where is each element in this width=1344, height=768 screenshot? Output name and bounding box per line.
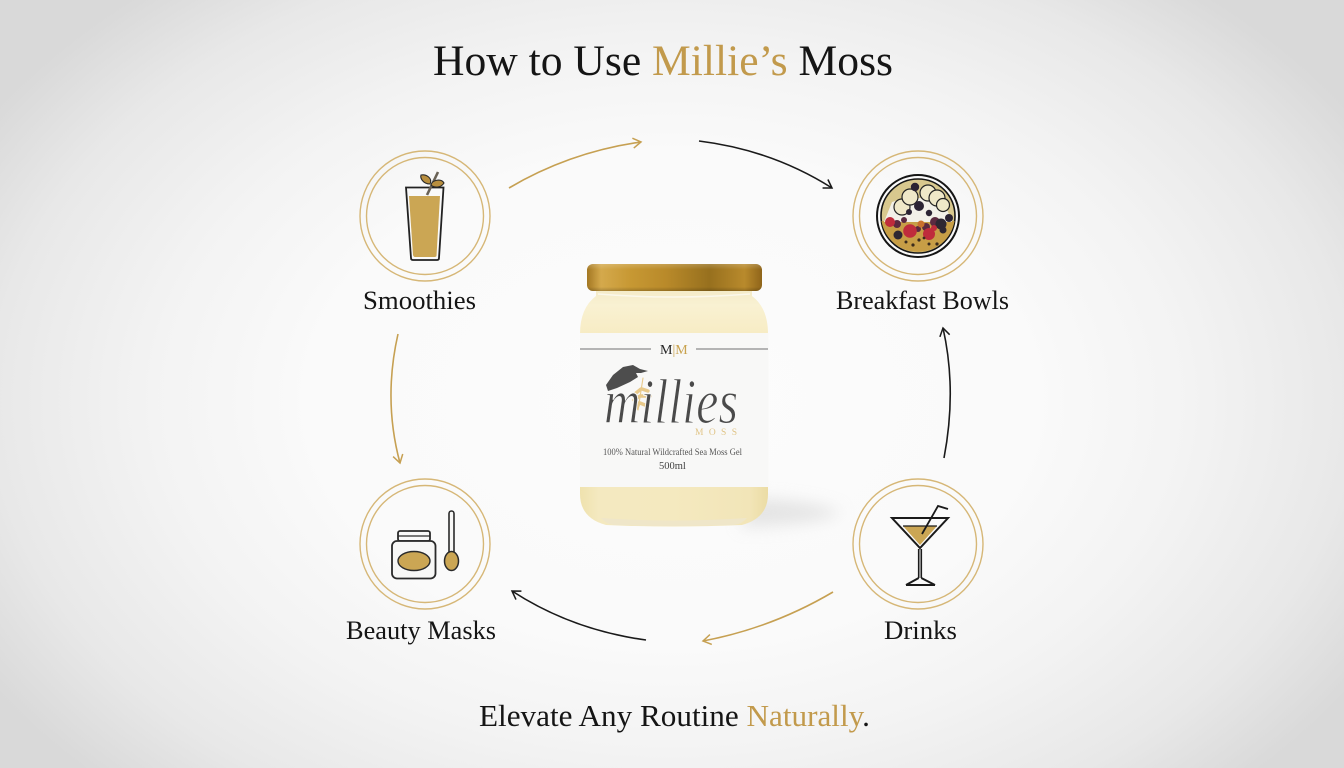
arrow: bottom to beauty masks — [512, 591, 646, 640]
label logo: sprig — [634, 378, 650, 410]
icon ring: breakfast bowls — [853, 151, 983, 281]
jar shadow — [740, 499, 842, 527]
label description: 100% Natural Wildcrafted Sea Moss Gel — [603, 447, 742, 458]
icon ring: smoothies — [360, 151, 490, 281]
icon: smoothie glass — [406, 172, 444, 260]
label: breakfast bowls: Breakfast Bowls — [836, 286, 1009, 315]
label: smoothies: Smoothies — [363, 285, 476, 315]
product jar — [580, 264, 768, 526]
label logo: moss: MOSS — [695, 428, 737, 438]
jar neck and shoulder — [580, 290, 768, 334]
label monogram: M|M — [660, 343, 688, 358]
icon ring: beauty masks — [360, 479, 490, 609]
label: drinks: Drinks — [884, 615, 957, 645]
icon: beauty jar and spoon — [392, 511, 458, 578]
panel: breakfast bowls — [836, 151, 1009, 315]
jar label — [580, 333, 768, 487]
arrow: drinks to breakfast bowls — [943, 328, 950, 458]
arrow: top to breakfast bowls — [699, 141, 832, 188]
label logo: script name: millies — [604, 366, 738, 437]
label logo: hand — [606, 365, 648, 391]
jar base — [580, 486, 768, 526]
icon: martini glass — [892, 506, 948, 585]
title: How to Use Millie’s Moss — [433, 38, 893, 85]
label volume: 500ml — [659, 461, 686, 472]
icon ring: drinks — [853, 479, 983, 609]
jar lid — [587, 264, 762, 291]
icon: breakfast bowl — [877, 175, 959, 257]
arrow: smoothies to breakfast bowls — [509, 142, 641, 188]
panel: smoothies — [360, 151, 490, 315]
arrow: smoothies to beauty masks — [391, 334, 400, 463]
tagline: Elevate Any Routine Naturally. — [479, 698, 870, 733]
panel: beauty masks — [346, 479, 496, 645]
arrow: drinks to bottom — [703, 592, 833, 641]
panel: drinks — [853, 479, 983, 645]
label: beauty masks: Beauty Masks — [346, 616, 496, 645]
